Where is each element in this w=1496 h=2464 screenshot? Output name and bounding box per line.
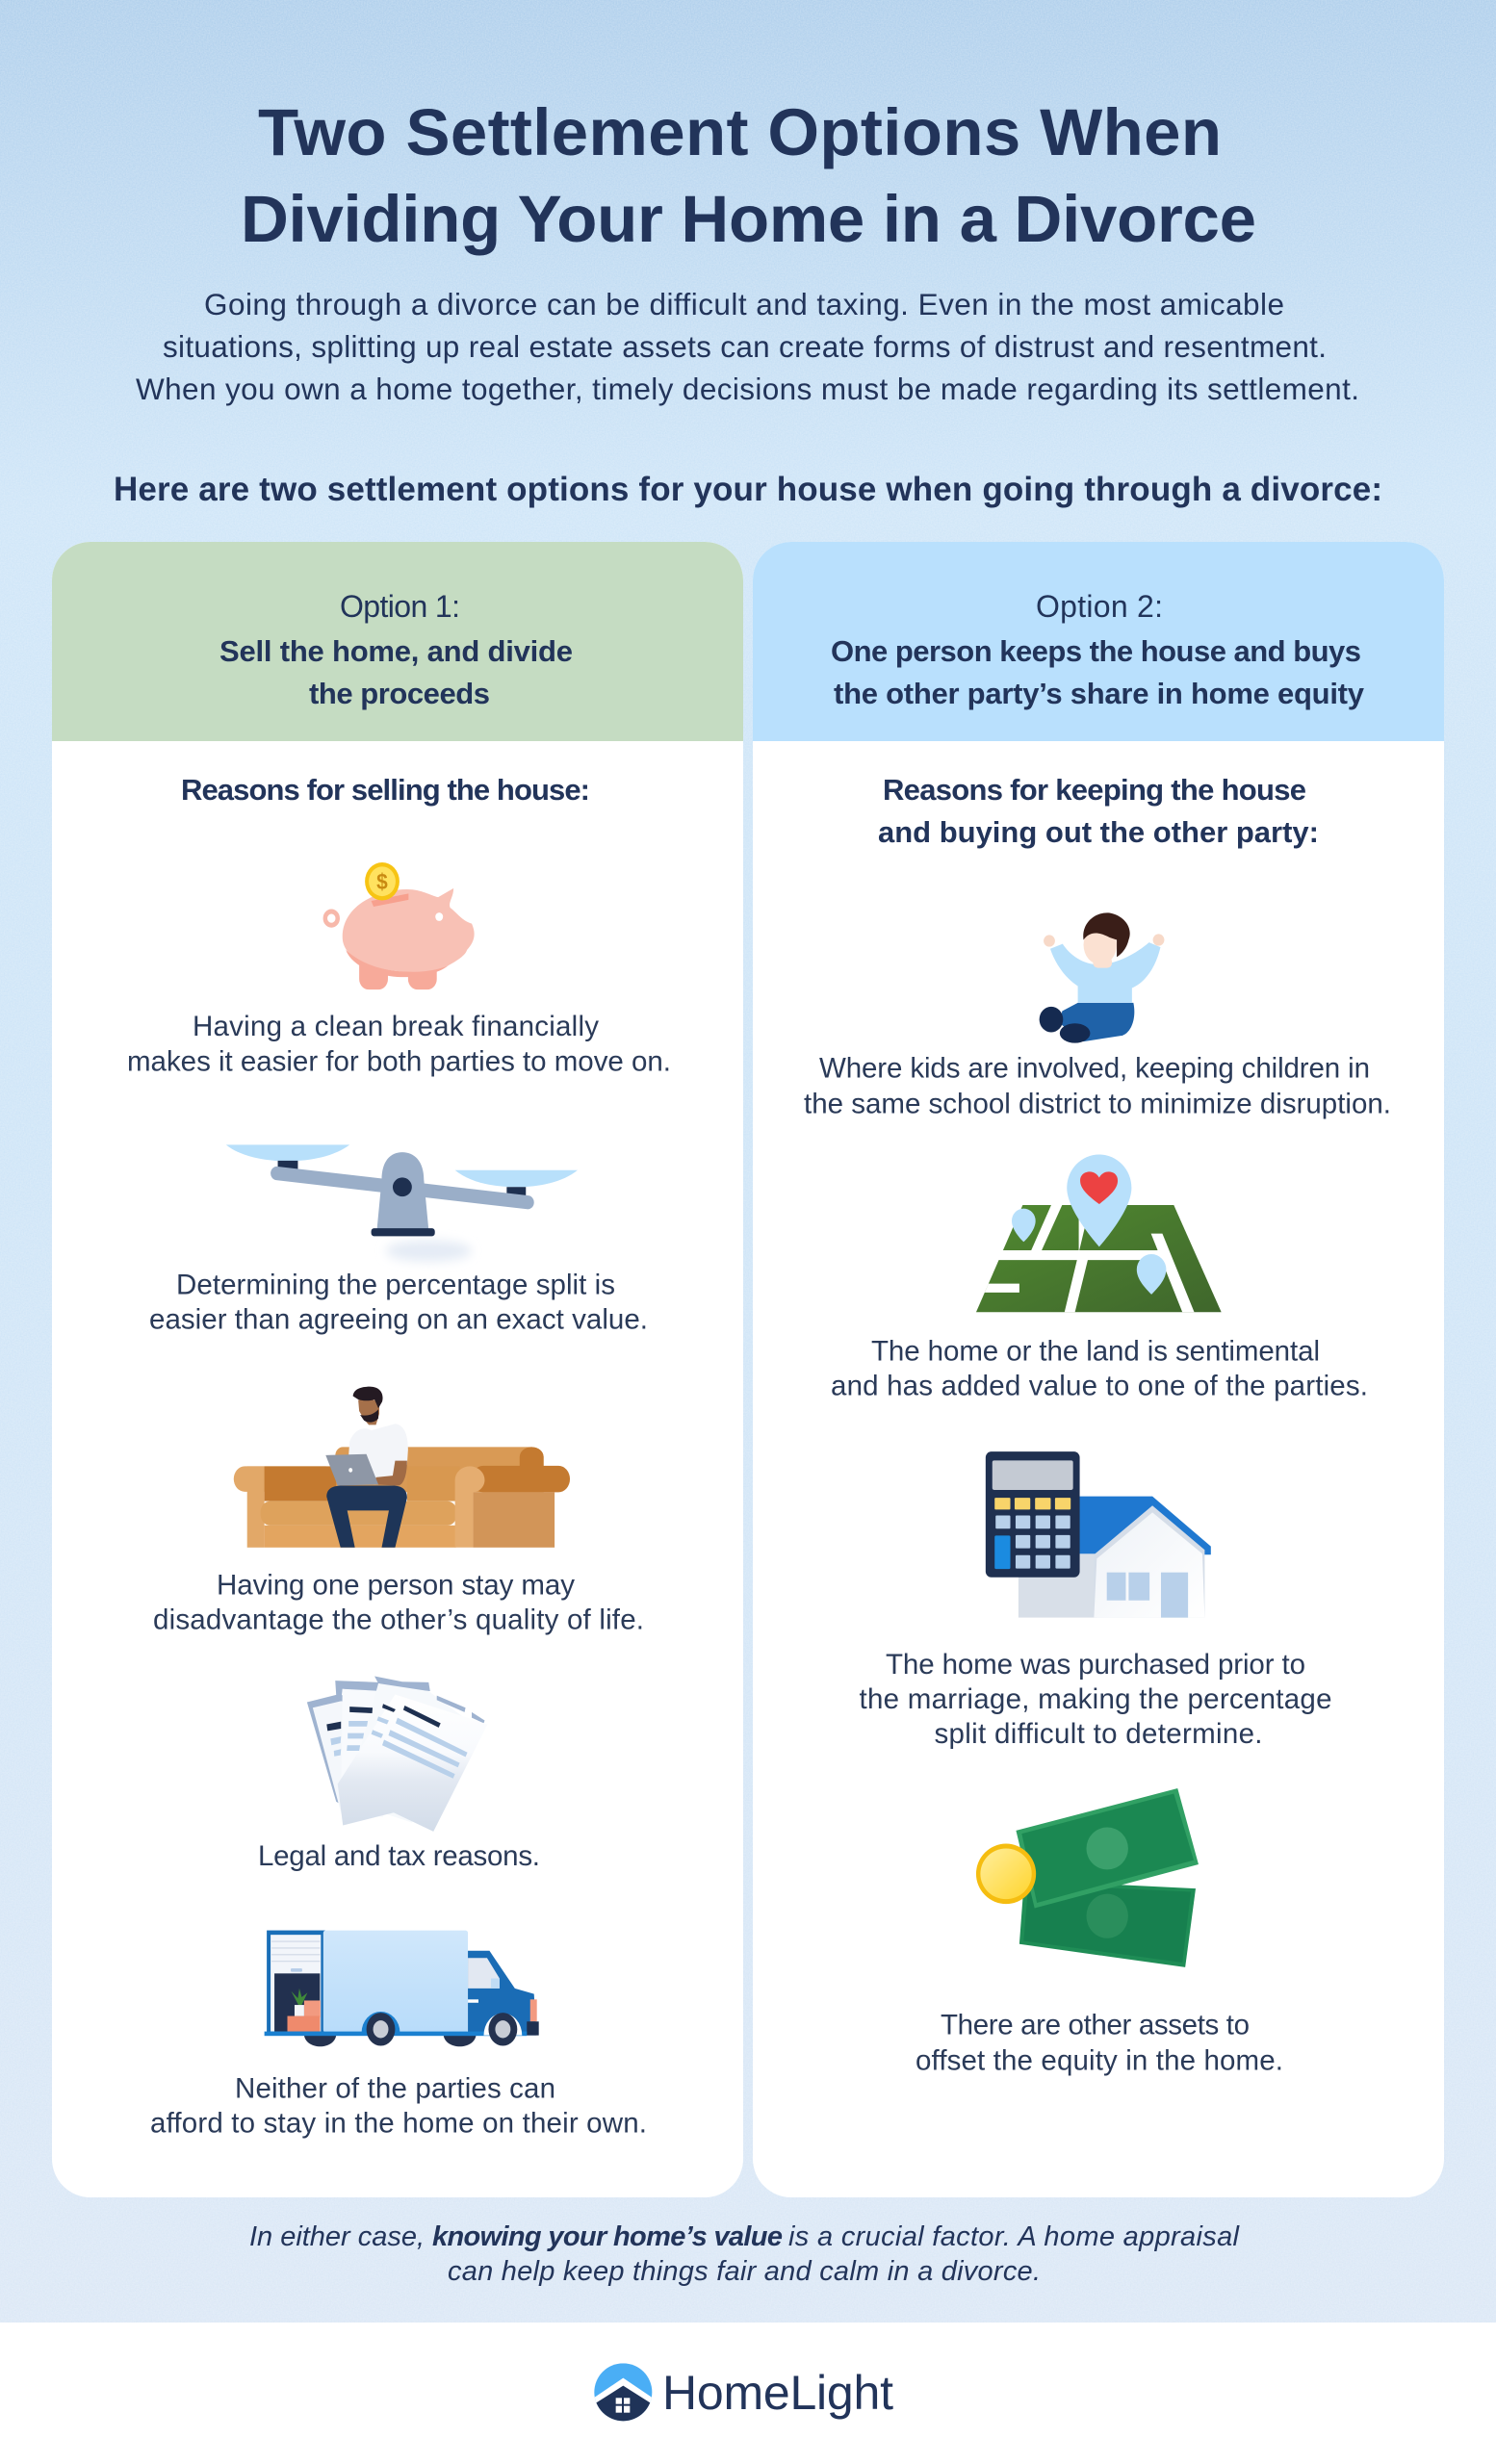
icon: cash and coin bbox=[976, 1788, 1199, 1967]
option 1 header band bbox=[52, 542, 743, 741]
reason text: easier than agreeing on an exact value. bbox=[149, 1303, 648, 1336]
footer note: is a crucial factor. A home appraisal bbox=[788, 2221, 1241, 2252]
option 1 heading: Sell the home, and divide bbox=[219, 634, 573, 668]
icon: legal documents bbox=[307, 1677, 487, 1832]
icon: piggy bank: $ bbox=[376, 869, 388, 894]
subheading: Here are two settlement options for your house when going through a divorce: bbox=[114, 471, 1382, 508]
reason text: The home or the land is sentimental bbox=[871, 1336, 1320, 1367]
option 1 heading bbox=[219, 634, 573, 710]
icon: map with location pins bbox=[976, 1154, 1222, 1312]
option 2 header band bbox=[753, 542, 1444, 741]
reason text: the same school district to minimize disruption. bbox=[804, 1088, 1391, 1120]
intro paragraph: situations, splitting up real estate assets can create forms of distrust and resentment. bbox=[163, 329, 1327, 364]
option 1 heading: the proceeds bbox=[309, 677, 490, 710]
reason text: Neither of the parties can bbox=[235, 2073, 555, 2104]
reason text: Legal and tax reasons. bbox=[258, 1840, 540, 1872]
reason text: There are other assets to bbox=[941, 2010, 1250, 2040]
wordmark: HomeLight bbox=[662, 2366, 893, 2420]
reason text: disadvantage the other’s quality of life. bbox=[153, 1604, 644, 1636]
option 2 heading: One person keeps the house and buys bbox=[831, 634, 1361, 668]
reason text bbox=[149, 1269, 648, 1336]
footer note bbox=[249, 2221, 1241, 2287]
option 1 reasons heading: Reasons for selling the house: bbox=[181, 773, 590, 807]
option 2 reasons heading: and buying out the other party: bbox=[878, 815, 1319, 849]
icon: house mark bbox=[592, 2363, 655, 2423]
reason text bbox=[150, 2073, 647, 2139]
title: Dividing Your Home in a Divorce bbox=[241, 182, 1256, 256]
intro paragraph: When you own a home together, timely decisions must be made regarding its settlement. bbox=[136, 372, 1359, 406]
reason text bbox=[831, 1336, 1368, 1401]
reason text: Having one person stay may bbox=[217, 1569, 575, 1602]
intro paragraph: Going through a divorce can be difficult and taxing. Even in the most amicable bbox=[204, 287, 1284, 321]
reason text: Having a clean break financially bbox=[193, 1011, 599, 1042]
intro paragraph bbox=[136, 287, 1359, 406]
panel: option 2 bbox=[753, 542, 1444, 2197]
option 2 reasons heading: Reasons for keeping the house bbox=[883, 773, 1306, 807]
icon: balance scale bbox=[226, 1144, 578, 1262]
footer note: In either case, bbox=[249, 2221, 425, 2252]
reason text bbox=[916, 2010, 1283, 2077]
reason text: Determining the percentage split is bbox=[176, 1269, 615, 1301]
icon: child with raised arms bbox=[1040, 912, 1164, 1043]
option 2 heading: the other party’s share in home equity bbox=[834, 677, 1365, 710]
option 2 heading bbox=[831, 634, 1365, 710]
icon: moving truck bbox=[265, 1931, 539, 2046]
reason text bbox=[859, 1649, 1332, 1750]
reason text: The home was purchased prior to bbox=[886, 1649, 1305, 1681]
reason text: makes it easier for both parties to move on. bbox=[127, 1045, 671, 1078]
title: Two Settlement Options When bbox=[258, 95, 1222, 169]
reason text: and has added value to one of the parties. bbox=[831, 1371, 1368, 1401]
reason text bbox=[127, 1011, 671, 1078]
panel: option 1 bbox=[52, 542, 743, 2197]
option 2 label: Option 2: bbox=[1036, 589, 1163, 624]
option 1 label: Option 1: bbox=[340, 589, 460, 624]
footer note: knowing your home’s value bbox=[432, 2221, 783, 2252]
reason text: afford to stay in the home on their own. bbox=[150, 2108, 647, 2139]
option 2 reasons heading bbox=[878, 773, 1319, 849]
icon: piggy bank bbox=[325, 862, 475, 989]
reason text: offset the equity in the home. bbox=[916, 2044, 1283, 2077]
footer note: can help keep things fair and calm in a divorce. bbox=[448, 2256, 1041, 2287]
reason text: the marriage, making the percentage bbox=[859, 1683, 1332, 1715]
icon: man on sofa with laptop bbox=[234, 1387, 570, 1548]
reason text bbox=[804, 1053, 1391, 1120]
reason text: Where kids are involved, keeping children in bbox=[819, 1053, 1370, 1084]
reason text: split difficult to determine. bbox=[934, 1718, 1263, 1750]
icon: calculator and house bbox=[986, 1451, 1211, 1618]
footer band bbox=[0, 2323, 1496, 2464]
logo: HomeLight bbox=[592, 2363, 893, 2423]
reason text bbox=[153, 1569, 644, 1636]
title bbox=[241, 95, 1256, 256]
